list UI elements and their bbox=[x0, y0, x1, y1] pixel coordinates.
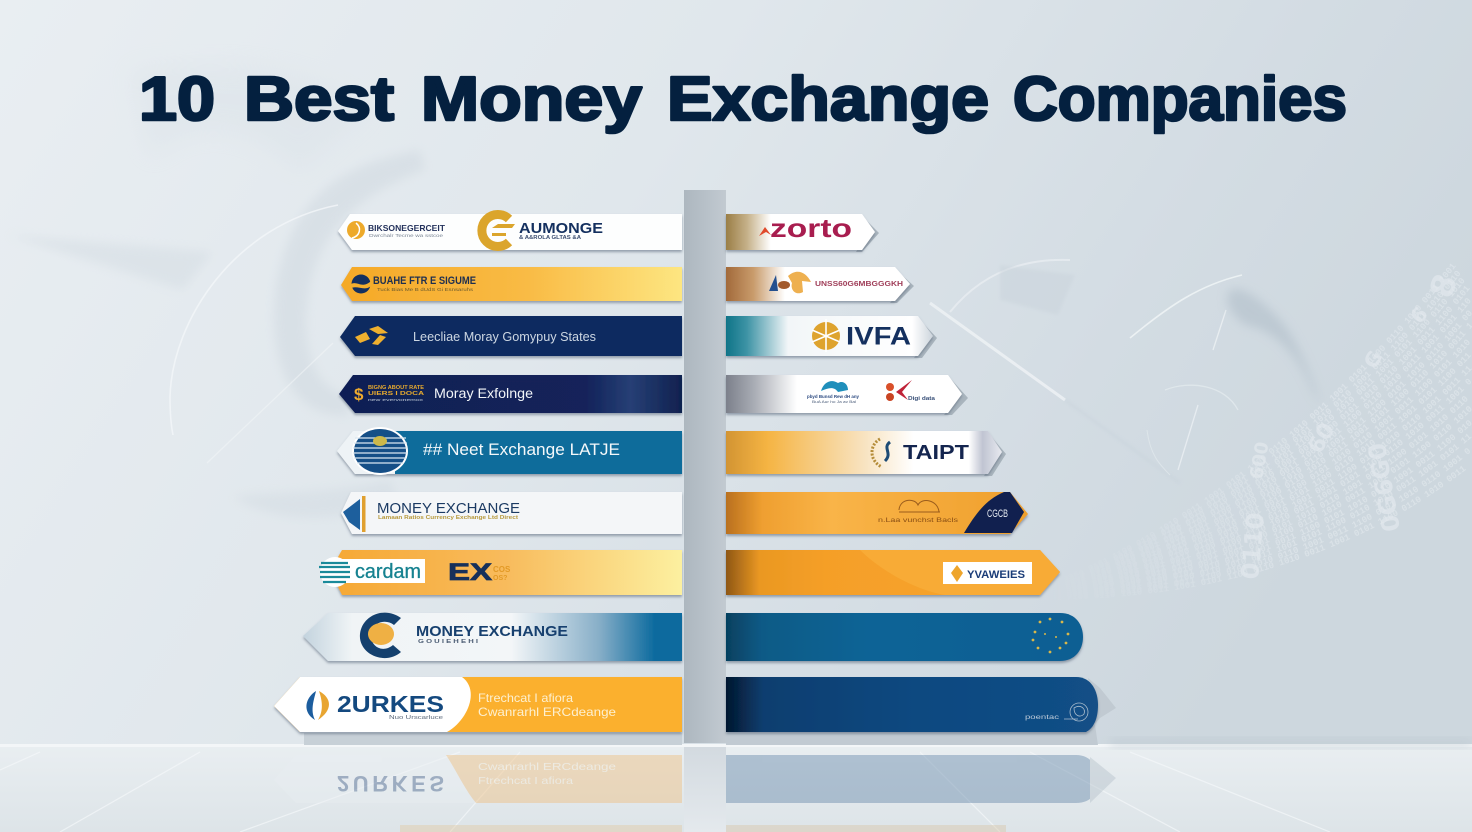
reflective floor bbox=[0, 738, 1472, 832]
left bar 2: BUAHE FTR E SIGUME bbox=[373, 275, 476, 287]
right bar 6 bbox=[726, 492, 1028, 534]
left bar 6: MONEY EXCHANGE bbox=[377, 501, 520, 517]
floor reflection of bars: Ftrechcat I afiora bbox=[478, 776, 574, 787]
left bar 3 bbox=[340, 316, 682, 356]
left bar 5 bbox=[337, 427, 682, 475]
right bar 8 bbox=[726, 613, 1083, 661]
left bar 1: & A&ROLA GLTAS &A bbox=[519, 235, 581, 241]
binary data ribbon: 0011 1001 0101 1100 0110 1010 0011 1001 0101 1100 0110 1010 0011 1001 0101 1100 0110 1010 0011 1001 bbox=[1217, 323, 1472, 526]
left bar 7: OS? bbox=[493, 575, 507, 582]
right bar 4: BuA Aur ho Ja av Bal bbox=[812, 399, 856, 404]
right bar 6: n.Laa vunchst Bacls bbox=[878, 517, 959, 524]
right bar 4 bbox=[726, 375, 968, 415]
left bar 1 bbox=[338, 214, 682, 250]
left bar 5: ## Neet Exchange LATJE bbox=[423, 441, 620, 459]
left bar 9: Nuo Urscarluce bbox=[389, 715, 443, 721]
left bar 4: new evervonemox bbox=[368, 397, 423, 402]
left bar 4 bbox=[339, 375, 682, 413]
left bar 6: Lamaan Ratios Currency Exchange Ltd Direct bbox=[378, 515, 518, 521]
left bar 9 bbox=[274, 677, 682, 745]
left bar 8 bbox=[303, 613, 682, 661]
left bar 9: Ftrechcat I afiora bbox=[478, 691, 573, 705]
left bar 9: Cwanrarhl ERCdeange bbox=[478, 705, 616, 719]
binary data ribbon bbox=[1208, 264, 1472, 584]
right bar 6: CGCB bbox=[987, 508, 1008, 520]
left bar 7: cardam bbox=[355, 561, 421, 583]
binary data ribbon: 1010 0110 1001 0011 1100 0101 1010 0110 1001 0011 1100 0101 1010 0110 1001 0011 1100 0101 1010 0110 bbox=[1218, 340, 1470, 532]
right bar 5: TAIPT bbox=[903, 442, 969, 464]
title: Companies bbox=[1013, 65, 1347, 134]
right bar 3: IVFA bbox=[846, 322, 911, 350]
binary data ribbon: 0101 1100 0110 1010 0011 1001 0101 1100 0110 1010 0011 1001 0101 1100 0110 1010 0011 1001 0101 1100 bbox=[1208, 466, 1466, 584]
large ribbon glyphs: 6 bbox=[1405, 302, 1433, 328]
right bar 9: poentac bbox=[1025, 714, 1060, 721]
large ribbon glyphs: 0G6G0 bbox=[1363, 441, 1406, 534]
left bar 1: Dwrchalr Tecme wa sstcoe bbox=[369, 233, 444, 238]
binary data ribbon: 1100 0101 1010 0110 1001 0011 1100 0101 1010 0110 1001 0011 1100 0101 1010 0110 1001 0011 1100 0101 bbox=[1209, 366, 1472, 548]
large ribbon glyphs: 8 bbox=[1422, 269, 1465, 303]
binary data ribbon: 1001 0011 1100 0101 1010 0110 1001 0011 1100 0101 1010 0110 1001 0011 1100 0101 1010 0110 1001 0011 bbox=[1209, 396, 1468, 558]
right bar 4: Digi data bbox=[908, 396, 936, 402]
title bbox=[139, 65, 1347, 134]
left bar 8: MONEY EXCHANGE bbox=[416, 623, 568, 640]
binary data ribbon: 0011 1001 0101 1100 0110 1010 0011 1001 0101 1100 0110 1010 0011 1001 0101 1100 0110 1010 0011 1001 bbox=[1218, 264, 1456, 494]
left bar 1: AUMONGE bbox=[519, 220, 603, 237]
title: Best bbox=[244, 65, 394, 134]
left bar 8: G O U I E H E H I bbox=[418, 639, 479, 645]
right bar 1: zorto bbox=[770, 213, 852, 243]
right bar 7 bbox=[726, 550, 1060, 595]
binary data ribbon: 1010 0110 1001 0011 1100 0101 1010 0110 1001 0011 1100 0101 1010 0110 1001 0011 1100 0101 1010 0110 bbox=[1218, 271, 1460, 498]
right bar 5 bbox=[726, 431, 1006, 476]
right bar 2: UNSS60G6MBGGGKH bbox=[815, 279, 903, 288]
left bar 7: EX bbox=[448, 559, 492, 586]
title: Exchange bbox=[667, 65, 989, 134]
title: Money bbox=[421, 65, 643, 134]
left bar 4: $ bbox=[354, 385, 364, 404]
right bar 2 bbox=[726, 267, 914, 303]
binary data ribbon: 0011 1001 0101 1100 0110 1010 0011 1001 0101 1100 0110 1010 0011 1001 0101 1100 0110 1010 0011 1001 bbox=[1216, 406, 1472, 560]
left bar 2 bbox=[341, 267, 682, 301]
right bar 9 bbox=[726, 677, 1116, 745]
center post bbox=[684, 190, 726, 832]
left bar 1: BIKSONEGERCEIT bbox=[368, 223, 446, 233]
floor reflection of bars: Cwanrarhl ERCdeange bbox=[478, 762, 617, 773]
binary data ribbon: 0101 1100 0110 1010 0011 1001 0101 1100 0110 1010 0011 1001 0101 1100 0110 1010 0011 1001 0101 1100 bbox=[1210, 379, 1471, 552]
binary data ribbon: 1001 0011 1100 0101 1010 0110 1001 0011 1100 0101 1010 0110 1001 0011 1100 0101 1010 0110 1001 0011 bbox=[1217, 310, 1472, 524]
right bar 3 bbox=[726, 316, 937, 358]
left bar 6 bbox=[341, 492, 682, 534]
left bar 9: 2URKES bbox=[337, 691, 444, 717]
large ribbon glyphs: 600 bbox=[1246, 440, 1273, 481]
left bar 4: Moray Exfolnge bbox=[434, 386, 533, 401]
binary data ribbon: 1100 0101 1010 0110 1001 0011 1100 0101 1010 0110 1001 0011 1100 0101 1010 0110 1001 0011 1100 0101 bbox=[1210, 448, 1470, 579]
right bar 1 bbox=[726, 213, 879, 252]
binary data ribbon: 1100 0101 1010 0110 1001 0011 1100 0101 1010 0110 1001 0011 1100 0101 1010 0110 1001 0011 1100 0101 bbox=[1217, 286, 1470, 510]
binary data ribbon: 0110 1010 0011 1001 0101 1100 0110 1010 0011 1001 0101 1100 0110 1010 0011 1001 0101 1100 0110 1010 bbox=[1217, 278, 1464, 507]
large ribbon glyphs: G bbox=[1359, 346, 1388, 372]
binary data ribbon: 0110 1010 0011 1001 0101 1100 0110 1010 0011 1001 0101 1100 0110 1010 0011 1001 0101 1100 0110 1010 bbox=[1208, 434, 1472, 574]
binary data ribbon: 0110 1010 0011 1001 0101 1100 0110 1010 0011 1001 0101 1100 0110 1010 0011 1001 0101 1100 0110 1010 bbox=[1222, 353, 1471, 538]
large ribbon glyphs bbox=[1236, 269, 1465, 581]
large ribbon glyphs: 60 bbox=[1304, 419, 1341, 458]
floor reflection of bars bbox=[274, 755, 1116, 832]
left bar 2: Tuck Bias Me B dUdS Gi Esnsaruhs bbox=[377, 287, 474, 292]
right bar 7: YVAWEIES bbox=[967, 569, 1025, 581]
right bar 4: pbyd Bunsd Rew dH any bbox=[807, 394, 859, 399]
left bar 7 bbox=[319, 550, 682, 595]
floor reflection of bars: 2URKES bbox=[337, 771, 444, 796]
left bar 4: BIGNG ABOUT RATE bbox=[368, 385, 425, 391]
binary data ribbon: 0101 1100 0110 1010 0011 1001 0101 1100 0110 1010 0011 1001 0101 1100 0110 1010 0011 1001 0101 1100 bbox=[1225, 298, 1470, 513]
left bar 7: COS bbox=[493, 565, 511, 574]
left bar 4: UIERS I DOCA bbox=[368, 391, 424, 397]
large ribbon glyphs: 0110 bbox=[1236, 512, 1270, 581]
title: 10 bbox=[139, 65, 215, 134]
left bar 3: Leecliae Moray Gomypuy States bbox=[413, 329, 596, 344]
binary data ribbon: 1010 0110 1001 0011 1100 0101 1010 0110 1001 0011 1100 0101 1010 0110 1001 0011 1100 0101 1010 0110 bbox=[1210, 420, 1472, 565]
